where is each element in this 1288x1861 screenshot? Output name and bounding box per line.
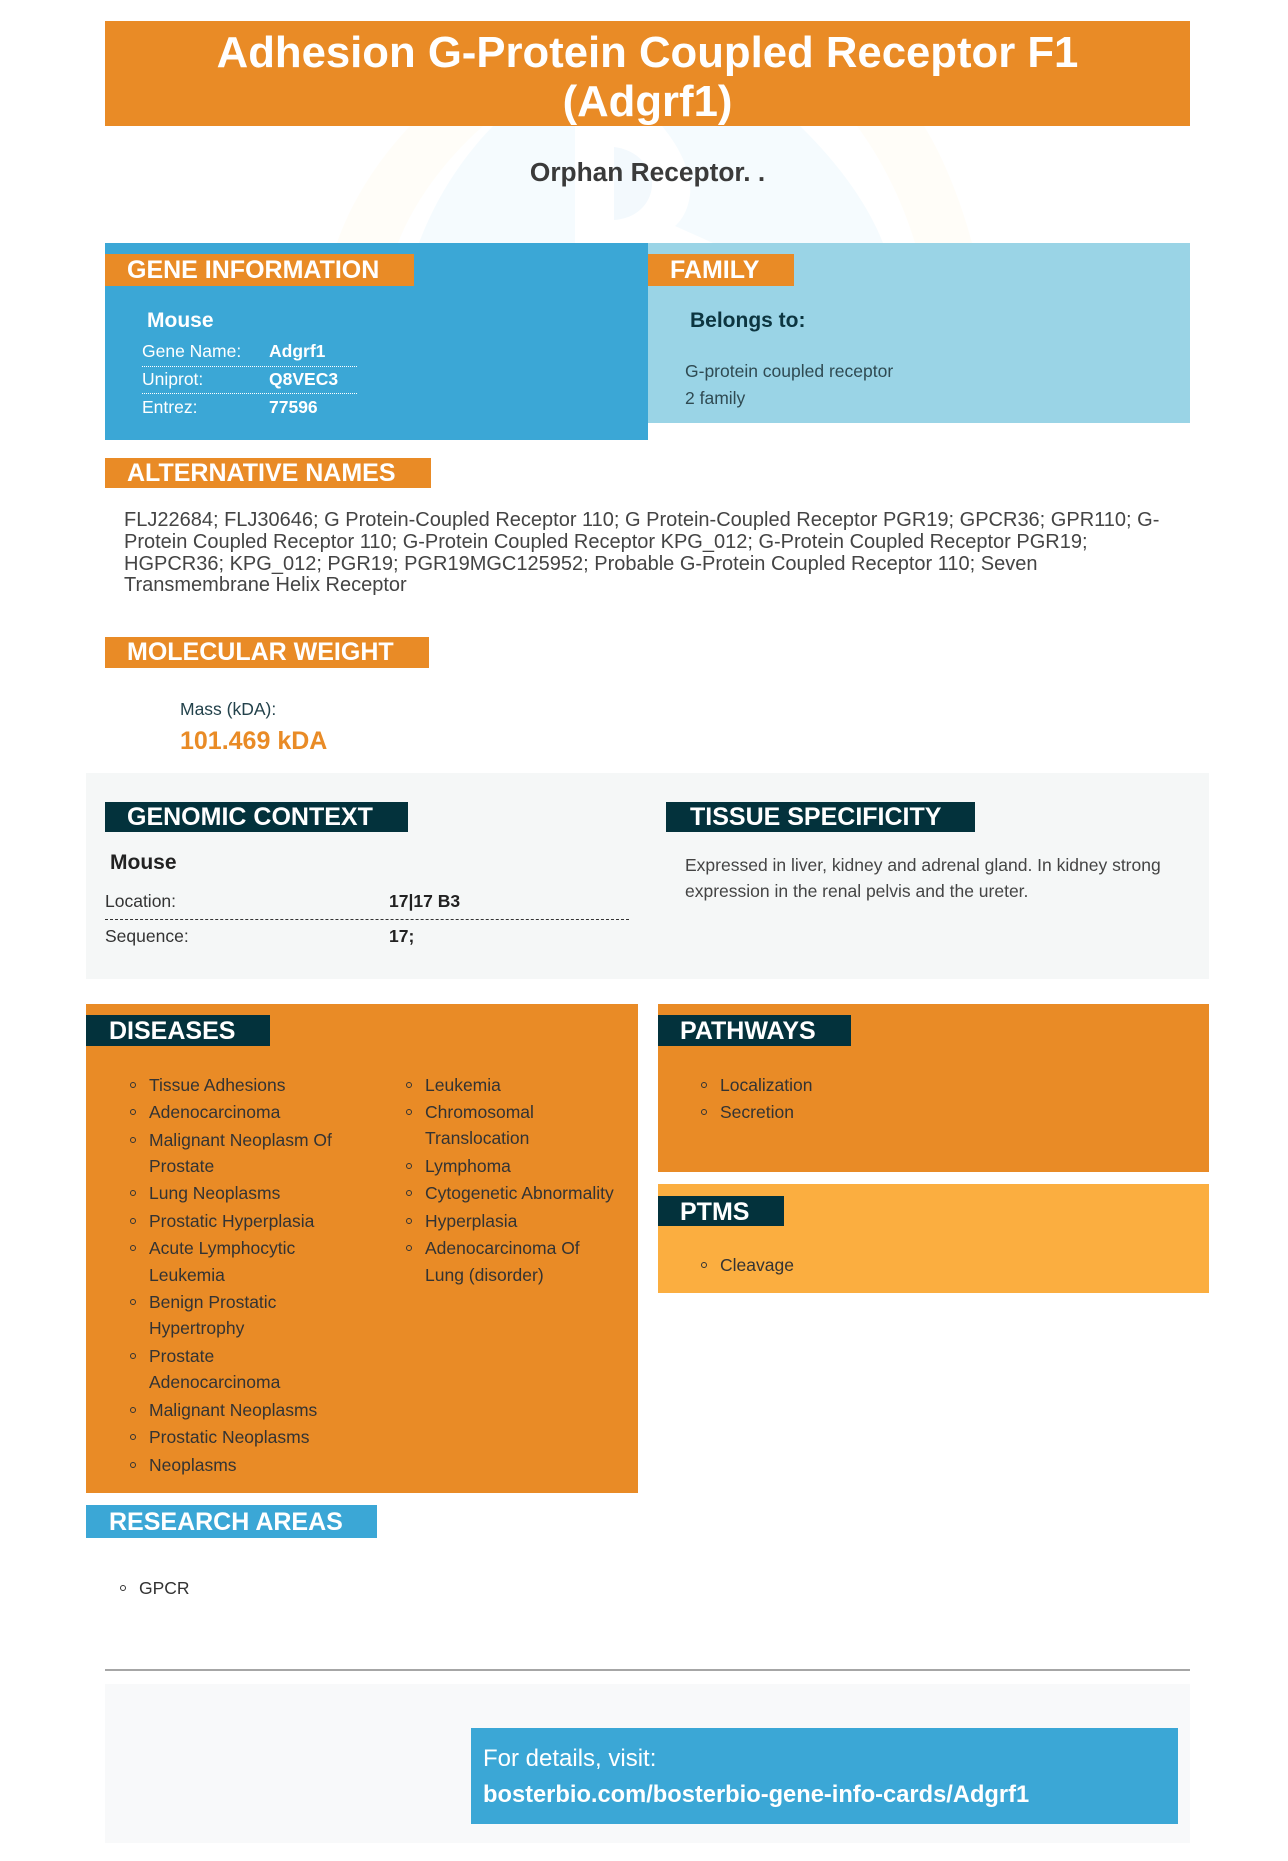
heading: research areas (86, 1505, 377, 1538)
panel: family (648, 243, 1190, 423)
gene name row: Adgrf1 (269, 341, 325, 361)
disease list column one: Prostatic Neoplasms (149, 1427, 309, 1447)
title banner: (Adgrf1) (563, 77, 732, 126)
belongs to label: Belongs to: (690, 309, 806, 332)
panel: gene information (105, 243, 648, 440)
gene name row (142, 338, 357, 367)
heading: family (648, 254, 794, 286)
entrez row (142, 397, 318, 417)
heading: ptms: PTMS (680, 1198, 749, 1226)
tissue specificity text: expression in the renal pelvis and the ureter. (685, 880, 1028, 900)
panel: ptms (658, 1184, 1209, 1293)
disease list column one: Neoplasms (149, 1455, 237, 1475)
title banner: Adhesion G-Protein Coupled Receptor F1 (217, 28, 1078, 77)
disease list column two: Lung (disorder) (425, 1265, 544, 1285)
disease list column one: Lung Neoplasms (149, 1183, 280, 1203)
location row (105, 888, 629, 920)
disease list column two: Translocation (425, 1128, 529, 1148)
location row: Location: (105, 891, 176, 911)
alternative names text (124, 509, 1159, 596)
sequence row (105, 926, 414, 946)
uniprot row: Uniprot: (142, 369, 203, 389)
callout label: For details, visit: (483, 1745, 656, 1772)
heading: research areas: RESEARCH AREAS (109, 1508, 343, 1536)
mass label: Mass (kDA): (180, 699, 276, 719)
family text: G-protein coupled receptor (685, 361, 893, 381)
disease list column one: Prostatic Hyperplasia (149, 1211, 314, 1231)
mass value: 101.469 kDA (180, 727, 327, 755)
organism label: Mouse (147, 309, 214, 332)
panel: footer (105, 1684, 1190, 1843)
entrez row: 77596 (269, 397, 318, 417)
heading: pathways: PATHWAYS (680, 1017, 816, 1045)
panel: pathways (658, 1004, 1209, 1172)
disease list column two: Leukemia (425, 1075, 501, 1095)
title banner (105, 21, 1190, 126)
alternative names text: Protein Coupled Receptor 110; G-Protein Coupled Receptor KPG_012; G-Protein Coupled Receptor PGR19; (124, 531, 1088, 553)
disease list column one: Leukemia (149, 1265, 225, 1285)
subtitle: Orphan Receptor. . (530, 157, 765, 187)
alternative names text: Transmembrane Helix Receptor (124, 574, 407, 596)
disease list column two: Hyperplasia (425, 1211, 517, 1231)
alternative names text: FLJ22684; FLJ30646; G Protein-Coupled Receptor 110; G Protein-Coupled Receptor PGR19; GPCR36; GPR110; G- (124, 509, 1159, 531)
location row: 17|17 B3 (389, 891, 460, 911)
panel: genomic context and tissue specificity (86, 773, 1209, 979)
uniprot row: Q8VEC3 (269, 369, 338, 389)
disease list column one: Hypertrophy (149, 1318, 244, 1338)
pathways list (701, 1075, 812, 1122)
heading: diseases (86, 1015, 270, 1046)
disease list column one: Acute Lymphocytic (149, 1238, 295, 1258)
callout: details link (471, 1728, 1178, 1824)
callout url: bosterbio.com/bosterbio-gene-info-cards/Adgrf1 (483, 1782, 1029, 1808)
heading: tissue specificity: TISSUE SPECIFICITY (690, 803, 941, 831)
ptms list: Cleavage (720, 1255, 794, 1275)
disease list column one: Tissue Adhesions (149, 1075, 286, 1095)
disease list column two: Cytogenetic Abnormality (425, 1183, 614, 1203)
disease list column one (130, 1075, 332, 1475)
heading: ptms (658, 1196, 784, 1226)
gene name row: Gene Name: (142, 341, 241, 361)
tissue specificity text (685, 855, 1161, 900)
sequence row: Sequence: (105, 926, 189, 946)
panel: genomic context and tissue specificity: 17; (389, 926, 414, 946)
heading: genomic context: GENOMIC CONTEXT (127, 803, 373, 831)
family text: 2 family (685, 388, 745, 408)
panel: diseases (86, 1004, 638, 1493)
disease list column one: Adenocarcinoma (149, 1372, 280, 1392)
disease list column two: Chromosomal (425, 1102, 534, 1122)
pathways list: Secretion (720, 1102, 794, 1122)
heading: gene information: GENE INFORMATION (127, 256, 379, 284)
heading: molecular weight: MOLECULAR WEIGHT (127, 638, 394, 666)
disease list column one: Malignant Neoplasm Of (149, 1130, 332, 1150)
family text (685, 361, 893, 408)
uniprot row (142, 366, 357, 394)
disease list column one: Prostate (149, 1346, 214, 1366)
disease list column one: Prostate (149, 1156, 214, 1176)
alternative names text: HGPCR36; KPG_012; PGR19; PGR19MGC125952; Probable G-Protein Coupled Receptor 110; Seven (124, 553, 1037, 575)
disease list column one: Benign Prostatic (149, 1292, 276, 1312)
heading: diseases: DISEASES (109, 1017, 235, 1045)
entrez row: Entrez: (142, 397, 197, 417)
divider (105, 1669, 1190, 1671)
heading: family: FAMILY (670, 256, 759, 284)
disease list column one: Adenocarcinoma (149, 1102, 280, 1122)
tissue specificity text: Expressed in liver, kidney and adrenal gland. In kidney strong (685, 855, 1161, 875)
disease list column one: Malignant Neoplasms (149, 1400, 317, 1420)
disease list column two (406, 1075, 614, 1285)
disease list column two: Lymphoma (425, 1156, 511, 1176)
research areas list: GPCR (139, 1578, 190, 1598)
pathways list: Localization (720, 1075, 812, 1095)
disease list column two: Adenocarcinoma Of (425, 1238, 580, 1258)
organism label: Mouse (110, 851, 177, 874)
heading: alternative names: ALTERNATIVE NAMES (127, 459, 396, 487)
heading: pathways (658, 1015, 851, 1046)
